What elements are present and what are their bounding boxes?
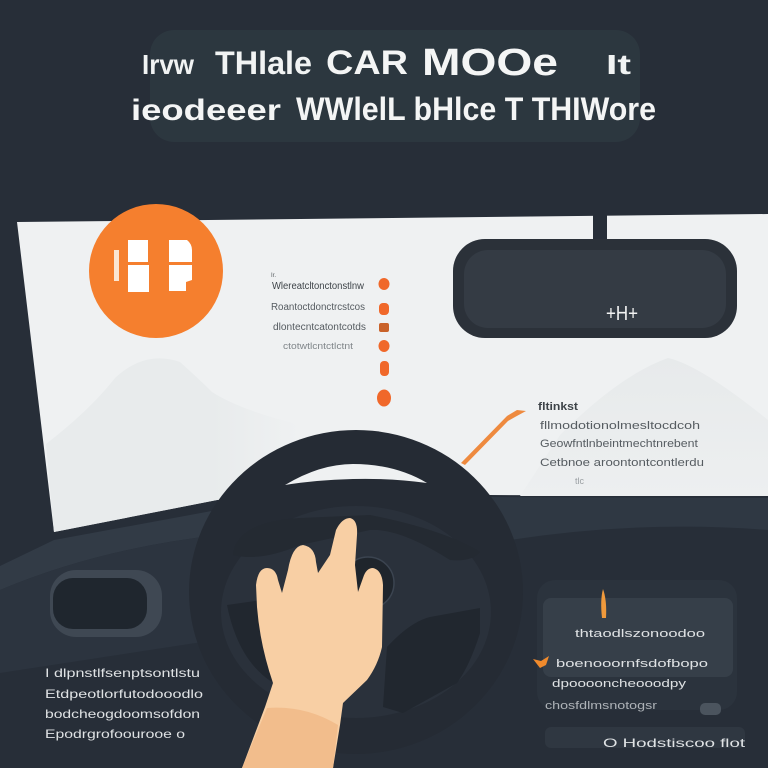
title: It: [606, 49, 631, 80]
orange circle icon: [89, 204, 223, 338]
lower right opening: [383, 608, 480, 713]
text block: windshield left: [271, 273, 366, 351]
title: ieodeeer: [131, 94, 281, 127]
steering wheel: [189, 430, 523, 754]
upper dark band: [233, 515, 480, 560]
text block: windshield right: fllmodotionolmesltocdcoh: [540, 420, 700, 432]
wheel hub: [221, 506, 491, 718]
screen text: chosfdlmsnotogsr: [545, 700, 657, 712]
text block: windshield left: ctotwtlcntctlctnt: [283, 341, 354, 351]
title: MOOe: [422, 42, 558, 84]
title: CAR: [326, 44, 408, 82]
horn button: [342, 557, 394, 609]
lower left opening: [227, 600, 272, 682]
title: WWlelL bHlce T THIWore: [296, 91, 656, 127]
text block: windshield left: Wlereatcltonctonstlnw: [272, 281, 365, 292]
text block: windshield right: fltinkst: [538, 401, 578, 413]
screen text: boenooornfsdofbopo: [556, 658, 708, 670]
text block: dashboard left: [45, 666, 203, 741]
hand: [242, 518, 383, 768]
wrist: [242, 708, 338, 768]
orange dots column: [377, 278, 391, 406]
title: THlale: [215, 45, 312, 81]
screen text: [545, 628, 746, 750]
panel: infotainment screen: [533, 580, 746, 750]
text block: dashboard left: Etdpeotlorfutodooodlo: [45, 687, 203, 701]
title: Irvw: [142, 49, 194, 80]
mountains left: [46, 358, 300, 532]
panel: windshield: [17, 214, 768, 532]
left air vent: [50, 570, 162, 637]
arrow: [461, 410, 526, 465]
windshield sliver: [285, 464, 427, 485]
orange up marker: [601, 589, 606, 618]
text block: windshield right: Cetbnoe aroontontcontlerdu: [540, 457, 704, 469]
text block: dashboard left: I dlpnstlfsenptsontlstu: [45, 666, 200, 680]
text block: windshield left: Roantoctdonctrcstcos: [271, 302, 365, 313]
text block: windshield right: tlc: [575, 476, 584, 486]
screen text: O Hodstiscoo flot: [603, 736, 746, 750]
screen text: dpooooncheooodpy: [552, 678, 687, 690]
title: [131, 30, 656, 142]
text block: dashboard left: Epodrgrofoourooe o: [45, 727, 185, 741]
text block: dashboard left: bodcheogdoomsofdon: [45, 707, 200, 721]
screen text: thtaodlszonoodoo: [575, 628, 705, 640]
mountains right: [520, 358, 768, 496]
text block: windshield right: [538, 401, 704, 486]
rearview mirror: [453, 210, 737, 338]
text block: windshield left: Ir.: [271, 273, 276, 279]
orange check marker: [533, 656, 549, 668]
text block: windshield right: Geowfntlnbeintmechtnrebent: [540, 438, 698, 450]
text block: windshield left: dlontecntcatontcotds: [273, 322, 366, 333]
dashboard: [0, 497, 768, 673]
mirror icon: +H+: [606, 303, 638, 325]
